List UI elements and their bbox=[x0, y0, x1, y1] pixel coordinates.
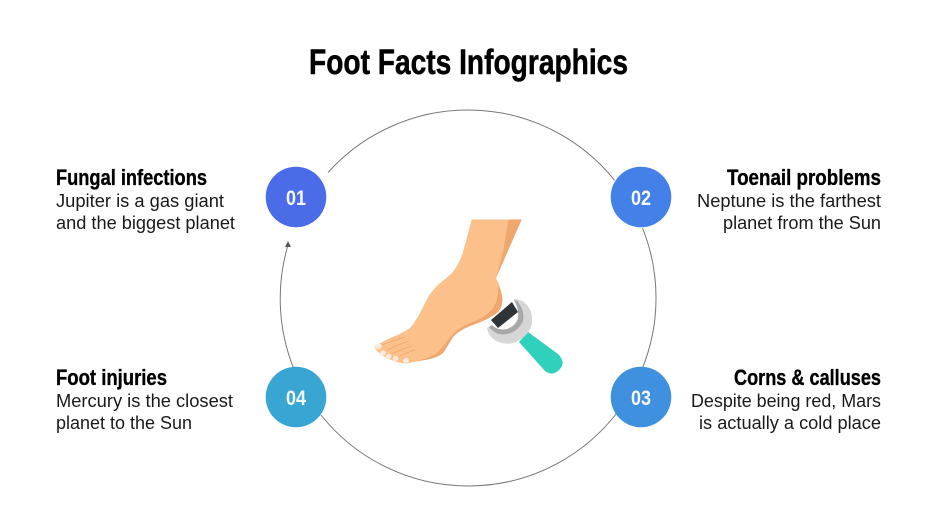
roller head inner band bbox=[489, 300, 523, 334]
roller head bbox=[487, 299, 532, 344]
text: corns and calluses: Despite being red, Mars bbox=[691, 391, 881, 411]
badge 01 bbox=[266, 167, 326, 227]
badge 01: 01 bbox=[286, 187, 306, 210]
badge 02 bbox=[611, 167, 671, 227]
badge 02: 02 bbox=[631, 187, 651, 210]
text: fungal infections: Jupiter is a gas giant bbox=[56, 191, 224, 211]
text: toenail problems: planet from the Sun bbox=[723, 213, 881, 233]
item 01 bbox=[56, 165, 326, 233]
heading: fungal infections: Fungal infections bbox=[56, 165, 207, 190]
text: toenail problems bbox=[697, 191, 881, 233]
leg and foot shading bbox=[415, 220, 522, 361]
item 03 bbox=[611, 365, 881, 433]
toe lines bbox=[382, 337, 415, 356]
illustration: foot and roller bbox=[374, 220, 563, 374]
cycle ring with arrow bbox=[280, 110, 656, 486]
badge 04: 04 bbox=[286, 387, 306, 410]
text: foot injuries: planet to the Sun bbox=[56, 413, 192, 433]
heading: foot injuries: Foot injuries bbox=[56, 365, 167, 390]
title: Foot Facts Infographics bbox=[309, 43, 628, 82]
text: foot injuries: Mercury is the closest bbox=[56, 391, 233, 411]
heading: toenail problems: Toenail problems bbox=[727, 165, 881, 190]
text: fungal infections bbox=[56, 191, 235, 233]
text: foot injuries bbox=[56, 391, 233, 433]
badge 04 bbox=[266, 367, 326, 427]
toenails bbox=[374, 343, 410, 364]
item 04 bbox=[56, 365, 326, 433]
item 02 bbox=[611, 165, 881, 233]
badge 03 bbox=[611, 367, 671, 427]
text: toenail problems: Neptune is the farthest bbox=[697, 191, 881, 211]
roller blade bbox=[491, 302, 518, 328]
text: corns and calluses: is actually a cold place bbox=[699, 413, 881, 433]
badge 03: 03 bbox=[631, 387, 651, 410]
leg and foot bbox=[375, 220, 522, 364]
text: fungal infections: and the biggest planet bbox=[56, 213, 235, 233]
roller handle bbox=[519, 332, 563, 374]
text: corns and calluses bbox=[691, 391, 881, 433]
heading: corns and calluses: Corns & calluses bbox=[734, 365, 881, 390]
